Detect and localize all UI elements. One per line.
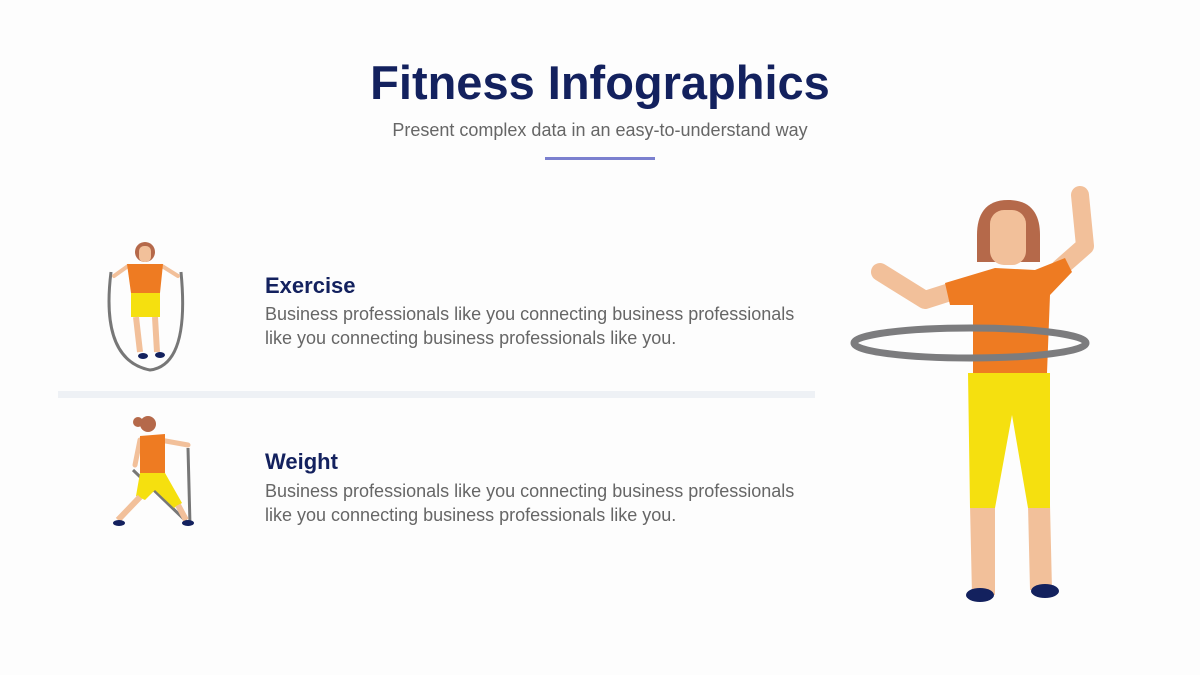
icon: jump rope figure	[109, 242, 183, 370]
divider	[58, 391, 815, 398]
heading: exercise: Exercise	[265, 273, 356, 298]
icon: hula hoop figure	[854, 195, 1086, 602]
icon: resistance band figure	[113, 416, 194, 526]
text: exercise: Business professionals like you connecting business professionals like you connecting business professionals like you.	[265, 304, 794, 348]
accent line	[545, 157, 655, 160]
heading: weight: Weight	[265, 449, 338, 474]
title: Fitness Infographics	[370, 56, 830, 109]
text: weight: Business professionals like you connecting business professionals like you connecting business professionals like you.	[265, 481, 794, 524]
subtitle: Present complex data in an easy-to-understand way	[392, 120, 808, 140]
